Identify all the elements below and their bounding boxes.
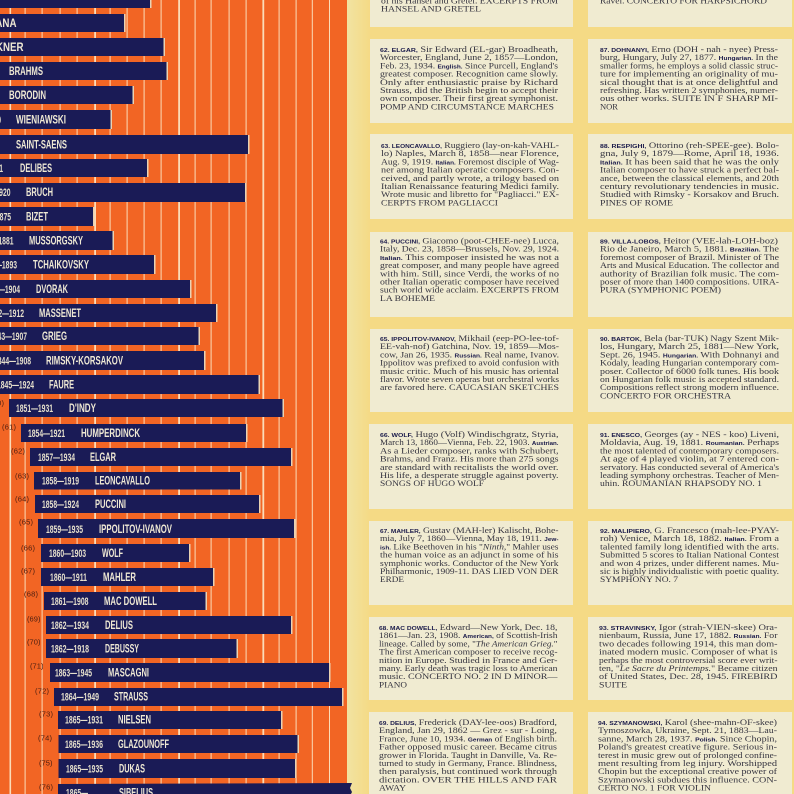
bar: Brahms: BRAHMS bbox=[9, 66, 43, 78]
bar: Ippolitov-Ivanov: IPPOLITOV-IVANOV bbox=[99, 524, 172, 536]
label: number 66: (66) bbox=[21, 544, 36, 552]
card 62: Elgar: greatest composer. Recognition came slowly. bbox=[380, 69, 558, 79]
bar: Humperdinck: HUMPERDINCK bbox=[81, 428, 140, 440]
bar: Wolf: 1860—1903 bbox=[49, 548, 86, 560]
card 92: Malipiero: and won 4 prizes, under different names. Mu- bbox=[600, 558, 779, 568]
card 87: Dohnanyi bbox=[588, 39, 792, 123]
panel: composer timeline chart bbox=[0, 0, 352, 794]
label: number 76: (76) bbox=[39, 782, 54, 792]
card 68: Mac Dowell: PIANO bbox=[379, 679, 407, 689]
panel: biography cards, left column bbox=[369, 0, 573, 794]
panel: biography cards, right column bbox=[588, 0, 792, 794]
card 94: Szymanowski: sanne, March 28, 1937. Polish. Since Chopin, bbox=[598, 733, 777, 743]
card 63: Leoncavallo: 63. LEONCAVALLO, Ruggiero (lay-on-kah-VAHL- bbox=[381, 140, 559, 150]
bar: Puccini bbox=[35, 495, 260, 513]
card 66: Wolf: SONGS OF HUGO WOLF bbox=[380, 478, 484, 488]
card 61: Humperdinck tail bbox=[370, 0, 573, 27]
bar: Wieniawski bbox=[0, 110, 112, 129]
card 94: Szymanowski: Tymoszowka, Ukraine, Sept. 21, 1883—Lau- bbox=[598, 725, 777, 735]
bar: Puccini: 1858—1924 bbox=[42, 499, 80, 511]
bar: Mac Dowell bbox=[44, 592, 207, 610]
card 63: Leoncavallo: Wrote music and libretto for "Pagliacci." EX- bbox=[381, 189, 559, 199]
card 88: Respighi: 88. RESPIGHI, Ottorino (reh-SPEE-gee). Bolo- bbox=[600, 140, 779, 150]
card 65: Ippolitov-Ivanov: 65. IPPOLITOV-IVANOV, Mikhail (eep-PO-lee-tof- bbox=[380, 333, 559, 343]
label: number 61: (61) bbox=[2, 422, 16, 432]
card 64: Puccini: Italian. This composer insisted he was not a bbox=[380, 252, 559, 262]
bar: Elgar bbox=[30, 448, 292, 466]
card 91: Enesco: servatory. Has conducted several of America's bbox=[600, 462, 780, 472]
bar: Smetana bbox=[0, 14, 126, 32]
card 94: Szymanowski: 94. SZYMANOWSKI, Karol (shee-mahn-OF-skee) bbox=[598, 717, 777, 727]
card 65: Ippolitov-Ivanov: are favored here. CAUCASIAN SKETCHES bbox=[380, 382, 559, 392]
label: number 69: (69) bbox=[27, 614, 41, 624]
card 66: Wolf: March 13, 1860—Vienna, Feb. 22, 1903. Austrian. bbox=[380, 437, 559, 447]
card 69: Delius: England, Jan 29, 1862 — Grez - sur - Loing, bbox=[379, 725, 557, 735]
card 94: Szymanowski: Chopin but the exceptional creative power of bbox=[598, 766, 777, 776]
card 66: Wolf: Brahms, and Franz. His more than 275 songs bbox=[380, 454, 559, 464]
card 69: Delius bbox=[369, 712, 573, 794]
card 87: Dohnanyi: sical thought that is at once delightful and bbox=[600, 77, 779, 87]
bar: Elgar: ELGAR bbox=[90, 452, 116, 464]
card 63: Leoncavallo: Italian Renaissance featuring Medici family. bbox=[381, 181, 559, 191]
bar: Glazounoff: GLAZOUNOFF bbox=[118, 739, 169, 751]
bar: Grieg bbox=[0, 327, 200, 345]
bar: Glazounoff bbox=[58, 735, 299, 753]
card 68: Mac Dowell: lineage. Called by some, " The American Grieg. " bbox=[379, 638, 558, 648]
label: number 75: (75) bbox=[39, 758, 53, 768]
bar: Bizet bbox=[0, 207, 94, 226]
bar: Leoncavallo: LEONCAVALLO bbox=[95, 476, 150, 488]
bar: D'Indy: D'INDY bbox=[69, 403, 96, 415]
card 90: Bartok: Sept. 26, 1945. Hungarian. With Dohnanyi and bbox=[600, 349, 780, 359]
card 62: Elgar: 62. ELGAR, Sir Edward (EL-gar) Broadheath, bbox=[380, 44, 558, 54]
card 87: Dohnanyi: refreshing. Has written 2 symphonies, numer- bbox=[600, 85, 778, 95]
bar: Rimsky-Korsakov: RIMSKY-KORSAKOV bbox=[46, 356, 123, 368]
card 88: Respighi: gna, July 9, 1879—Rome, April 18, 1936. bbox=[600, 148, 779, 158]
card 63: Leoncavallo: ner among Italian operatic composers. Con- bbox=[381, 165, 559, 175]
card 69: Delius: AWAY bbox=[379, 783, 406, 793]
card 92: Malipiero: 92. MALIPIERO, G. Francesco (mah-lee-PYAY- bbox=[600, 525, 779, 535]
card 62: Elgar: Only after enthusiastic praise by Richard bbox=[380, 77, 559, 87]
bar: Ippolitov-Ivanov bbox=[38, 519, 296, 538]
card 94: Szymanowski bbox=[588, 712, 792, 794]
label: number 68: (68) bbox=[24, 590, 38, 598]
card 61: Humperdinck tail: HANSEL AND GRETEL bbox=[381, 4, 481, 14]
card 64: Puccini bbox=[370, 232, 573, 317]
card 66: Wolf bbox=[369, 424, 573, 509]
card 94: Szymanowski: CERTO NO. 1 FOR VIOLIN bbox=[598, 783, 712, 793]
card 65: Ippolitov-Ivanov bbox=[370, 329, 573, 412]
card 66: Wolf: are standard with recitalists the world over. bbox=[380, 462, 558, 472]
card 87: Dohnanyi: NOR bbox=[600, 101, 618, 111]
card 89: Villa-Lobos: authority of Brazilian folk music. The com- bbox=[600, 268, 779, 278]
card 94: Szymanowski: Poland's greatest creative figure. Serious in- bbox=[598, 742, 777, 752]
bar: Faure: FAURE bbox=[49, 380, 74, 392]
bar: Sibelius bbox=[58, 783, 352, 794]
bar: Wolf: WOLF bbox=[102, 548, 123, 560]
card 87: Dohnanyi: ous other works. SUITE IN F SHARP MI- bbox=[600, 93, 778, 103]
bar: Massenet: MASSENET bbox=[39, 308, 81, 320]
bar: Wolf bbox=[41, 544, 190, 562]
card 90: Bartok: poser. Collector of 6000 folk tunes. His book bbox=[600, 366, 780, 376]
bar: Bizet: BIZET bbox=[26, 212, 48, 224]
bar: Mascagni: 1863—1945 bbox=[55, 668, 92, 680]
bar: Debussy: DEBUSSY bbox=[105, 644, 139, 656]
bar: Strauss: 1864—1949 bbox=[61, 692, 99, 704]
card 62: Elgar: Feb. 23, 1934. English. Since Purcell, England's bbox=[380, 60, 559, 70]
card 93: Stravinsky: 93. STRAVINSKY, Igor (strah-VIEN-skee) Ora- bbox=[599, 622, 778, 632]
card 67: Mahler bbox=[369, 521, 573, 605]
card 86: Ravel follower tail bbox=[588, 0, 792, 27]
card 89: Villa-Lobos: poser of more than 1400 compositions. UIRA- bbox=[600, 276, 779, 286]
bar: Dukas: DUKAS bbox=[119, 764, 145, 776]
bar: Nielsen bbox=[58, 711, 282, 729]
bar: D'Indy: 1851—1931 bbox=[16, 403, 53, 415]
card 93: Stravinsky: inated modern music. Composer of what is bbox=[599, 647, 778, 657]
bar: Borodin: BORODIN bbox=[9, 90, 46, 102]
card 69: Delius: Father opposed music career. Became citrus bbox=[379, 742, 558, 752]
card 88: Respighi: Italian composer to have struck a perfect bal- bbox=[600, 165, 779, 175]
bar: Elgar: 1857—1934 bbox=[38, 452, 76, 464]
card 64: Puccini: other Italian operatic composer have received bbox=[380, 276, 560, 286]
card 67: Mahler: ish. Like Beethoven in his " Ninth," Mahler uses bbox=[380, 541, 559, 551]
bar: Brahms bbox=[0, 62, 168, 80]
bar: Dvorak bbox=[0, 280, 192, 298]
card 91: Enesco bbox=[588, 424, 792, 509]
bar: Dukas bbox=[58, 759, 296, 778]
bar: D'Indy bbox=[9, 399, 284, 417]
card 62: Elgar: Worcester, England, June 2, 1857—London, bbox=[380, 52, 558, 62]
card 87: Dohnanyi: ture for implementing an originality of mu- bbox=[600, 69, 778, 79]
card 94: Szymanowski: terest in music grew out of prolonged confine- bbox=[598, 750, 777, 760]
bar: Leoncavallo bbox=[34, 472, 242, 490]
card 63: Leoncavallo bbox=[370, 134, 573, 219]
card 69: Delius: then paralysis, but continued work through bbox=[379, 766, 558, 776]
card 93: Stravinsky: two decades following 1914, this man dom- bbox=[599, 638, 778, 648]
card 65: Ippolitov-Ivanov: cow, Jan 26, 1935. Russian. Real name, Ivanov. bbox=[380, 349, 559, 359]
card 62: Elgar bbox=[370, 39, 573, 123]
card 87: Dohnanyi: 87. DOHNANYI, Erno (DOH - nah - nyee) Press- bbox=[600, 44, 778, 54]
label: number 67: (67) bbox=[21, 566, 36, 576]
card 94: Szymanowski: ment resulting from leg injury. Worshipped bbox=[598, 758, 778, 768]
card 67: Mahler: ERDE bbox=[380, 574, 404, 584]
card 69: Delius: turned to study in Germany, France. Blindness, bbox=[379, 758, 557, 768]
bar: Puccini: PUCCINI bbox=[95, 499, 126, 511]
bar: Bruch: BRUCH bbox=[26, 187, 53, 199]
label: number 65: (65) bbox=[19, 518, 34, 526]
card 93: Stravinsky: perhaps the most controversial score ever writ- bbox=[599, 655, 778, 665]
bar: Grieg: GRIEG bbox=[42, 331, 67, 343]
label: number 64: (64) bbox=[15, 494, 30, 504]
card 69: Delius: grower in Florida. Taught in Danville, Va. Re- bbox=[379, 750, 557, 760]
bar: Humperdinck: 1854—1921 bbox=[28, 428, 65, 440]
card 88: Respighi: ance, between the classical elements, and 20th bbox=[600, 173, 780, 183]
card 64: Puccini: LA BOHEME bbox=[380, 293, 435, 303]
card 64: Puccini: such world wide acclaim. EXCERPTS FROM bbox=[380, 285, 559, 295]
paper edge highlight bbox=[347, 0, 370, 794]
card 90: Bartok bbox=[588, 329, 792, 412]
card 68: Mac Dowell: 68. MAC DOWELL, Edward—New York, Dec. 18, bbox=[379, 622, 558, 632]
card 92: Malipiero: talented family long identified with the arts. bbox=[600, 541, 779, 551]
card 89: Villa-Lobos bbox=[588, 232, 792, 317]
card 63: Leoncavallo: ceived, and partly wrote, a trilogy based on bbox=[381, 173, 560, 183]
bar: Bruckner bbox=[0, 38, 165, 56]
card 68: Mac Dowell: nition in Europe. Studied in France and Ger- bbox=[379, 655, 558, 665]
bar: Glazounoff: 1865—1936 bbox=[65, 739, 103, 751]
card 89: Villa-Lobos: foremost composer of Brazil. Minister of The bbox=[600, 252, 779, 262]
bar: Mascagni bbox=[50, 663, 330, 682]
card 63: Leoncavallo: Aug. 9, 1919. Italian. Foremost disciple of Wag- bbox=[381, 156, 559, 166]
card 91: Enesco: uhin. ROUMANIAN RHAPSODY NO. 1 bbox=[600, 478, 762, 488]
bar: unnamed top composer bbox=[0, 0, 152, 8]
label: number 70: (70) bbox=[27, 638, 41, 646]
label: number 71: (71) bbox=[30, 662, 44, 670]
bar: Delius: DELIUS bbox=[105, 620, 133, 632]
card 88: Respighi: Italian. It has been said that he was the only bbox=[600, 156, 780, 166]
card 90: Bartok: Kodaly, leading Hungarian contemporary com- bbox=[600, 358, 779, 368]
card 67: Mahler: mia, July 7, 1860—Vienna, May 18, 1911. Jew- bbox=[380, 533, 559, 543]
bar: Humperdinck bbox=[21, 424, 248, 442]
card 91: Enesco: 91. ENESCO, Georges (ay - NES - koo) Liveni, bbox=[600, 429, 779, 439]
card 64: Puccini: with him. Still, since Verdi, the works of no bbox=[380, 268, 559, 278]
bar: Borodin bbox=[0, 86, 134, 104]
card 93: Stravinsky bbox=[588, 617, 792, 700]
bar: Mahler bbox=[41, 568, 214, 586]
bar: Delius: 1862—1934 bbox=[51, 620, 90, 632]
bar: Mac Dowell: MAC DOWELL bbox=[104, 596, 157, 608]
bar: Delibes bbox=[0, 159, 148, 177]
bar: Faure bbox=[0, 375, 260, 394]
bar: Mascagni: MASCAGNI bbox=[108, 668, 149, 680]
card 87: Dohnanyi: burg, Hungary, July 27, 1877. Hungarian. In the bbox=[600, 52, 778, 62]
bar: Nielsen: 1865—1931 bbox=[65, 714, 103, 726]
bar: Debussy bbox=[46, 639, 238, 658]
card 90: Bartok: CONCERTO FOR ORCHESTRA bbox=[600, 390, 732, 400]
card 90: Bartok: los, Hungary, March 25, 1881—New York, bbox=[600, 341, 779, 351]
bar: Wieniawski: WIENIAWSKI bbox=[16, 114, 66, 126]
card 62: Elgar: Strauss, did the British begin to accept their bbox=[380, 85, 558, 95]
label: number 73: (73) bbox=[39, 710, 54, 718]
card 63: Leoncavallo: lo) Naples, March 8, 1858—near Florence, bbox=[381, 148, 559, 158]
card 93: Stravinsky: ten, " Le Sacre du Printemps. " Became citizen bbox=[599, 663, 778, 673]
card 92: Malipiero: Submitted 5 scores to Italian National Contest bbox=[600, 550, 780, 560]
bar: Nielsen: NIELSEN bbox=[118, 714, 151, 726]
bar: Dukas: 1865—1935 bbox=[66, 764, 103, 776]
card 63: Leoncavallo: CERPTS FROM PAGLIACCI bbox=[381, 197, 498, 207]
card 65: Ippolitov-Ivanov: EE-vah-nof) Gatchina, Nov. 19, 1859—Mos- bbox=[380, 341, 559, 351]
card 92: Malipiero: SYMPHONY NO. 7 bbox=[600, 574, 679, 584]
bar: Saint-Saens: SAINT-SAENS bbox=[16, 140, 67, 152]
bar: Bruch bbox=[0, 183, 246, 202]
bar: Strauss: STRAUSS bbox=[114, 692, 148, 704]
bar: Strauss bbox=[54, 688, 344, 706]
card 65: Ippolitov-Ivanov: flavor. Wrote seven operas but orchestral works bbox=[380, 374, 560, 384]
card 89: Villa-Lobos: 89. VILLA-LOBOS, Heitor (VEE-lah-LOH-boz) bbox=[600, 236, 778, 246]
bar: Tchaikovsky: TCHAIKOVSKY bbox=[33, 260, 89, 272]
card 89: Villa-Lobos: Arts and Musical Education. The collector and bbox=[600, 260, 780, 270]
card 90: Bartok: on Hungarian folk music is accepted standard. bbox=[600, 374, 779, 384]
label: number 62: (62) bbox=[11, 446, 26, 456]
bar: Rimsky-Korsakov bbox=[0, 351, 206, 370]
card 88: Respighi: century revolutionary tendencies in music. bbox=[600, 181, 779, 191]
card 88: Respighi: Studied with Rimsky - Korsakov and Bruch. bbox=[600, 189, 779, 199]
card 92: Malipiero: roh) Venice, March 18, 1882. Italian. From a bbox=[600, 533, 779, 543]
bar: Delibes: DELIBES bbox=[20, 163, 52, 175]
card 66: Wolf: 66. WOLF, Hugo (Volf) Windischgratz, Styria, bbox=[380, 429, 558, 439]
card 64: Puccini: Italy, Dec. 23, 1858—Brussels, Nov. 29, 1924. bbox=[380, 244, 559, 254]
label: number 74: (74) bbox=[38, 734, 52, 742]
label: number 63: (63) bbox=[15, 472, 30, 480]
card 91: Enesco: the most talented of contemporary composers. bbox=[600, 445, 779, 455]
bar: Dvorak: DVORAK bbox=[36, 284, 68, 296]
card 93: Stravinsky: of United States, Dec. 28, 1945. FIREBIRD bbox=[599, 671, 778, 681]
card 67: Mahler: the human voice as an adjunct in some of his bbox=[380, 550, 559, 560]
card 91: Enesco: leading symphony orchestras. Teacher of Men- bbox=[600, 470, 779, 480]
card 91: Enesco: At age of 4 played violin, at 7 entered con- bbox=[600, 454, 779, 464]
card 66: Wolf: As a Lieder composer, ranks with Schubert, bbox=[380, 445, 558, 455]
card 65: Ippolitov-Ivanov: Ippolitov was prefixed to avoid confusion with bbox=[380, 358, 560, 368]
label: number 72: (72) bbox=[35, 686, 50, 696]
card 90: Bartok: Compositions reflect strong modern influence. bbox=[600, 382, 779, 392]
card 67: Mahler: Philharmonic, 1909-11. DAS LIED VON DER bbox=[380, 566, 559, 576]
bar: Ippolitov-Ivanov: 1859—1935 bbox=[46, 524, 83, 536]
card 68: Mac Dowell: music. CONCERTO NO. 2 IN D MINOR— bbox=[379, 671, 558, 681]
bar: Mahler: 1860—1911 bbox=[50, 572, 87, 584]
card 64: Puccini: great composer, and many people have agreed bbox=[380, 260, 560, 270]
card 62: Elgar: POMP AND CIRCUMSTANCE MARCHES bbox=[380, 101, 554, 111]
card 69: Delius: dictation. OVER THE HILLS AND FAR bbox=[379, 774, 557, 784]
bar: Mussorgsky: MUSSORGSKY bbox=[29, 236, 83, 248]
card 68: Mac Dowell: 1861—Jan. 23, 1908. American, of Scottish-Irish bbox=[379, 630, 558, 640]
bar: Delius bbox=[46, 616, 292, 634]
card 88: Respighi bbox=[588, 134, 792, 219]
card 69: Delius: 69. DELIUS, Frederick (DAY-lee-oos) Bradford, bbox=[379, 717, 557, 727]
bar: Tchaikovsky bbox=[0, 255, 156, 274]
card 69: Delius: France, June 10, 1934. German of English birth. bbox=[379, 733, 557, 743]
card 93: Stravinsky: SUITE bbox=[599, 679, 627, 689]
card 90: Bartok: 90. BARTOK, Bela (bar-TUK) Nagy Szent Mik- bbox=[600, 333, 779, 343]
card 94: Szymanowski: Szymanowski subdues this influence. CON- bbox=[598, 774, 777, 784]
card 65: Ippolitov-Ivanov: music critic. Much of his music has oriental bbox=[380, 366, 560, 376]
orange chart field bbox=[0, 0, 347, 794]
bar: Mahler: MAHLER bbox=[103, 572, 136, 584]
card 88: Respighi: PINES OF ROME bbox=[600, 197, 673, 207]
bar: Massenet bbox=[0, 304, 218, 322]
card 68: Mac Dowell: The first American composer to receive recog- bbox=[379, 647, 558, 657]
card 66: Wolf: His life, a desperate struggle against poverty. bbox=[380, 470, 558, 480]
bar: Mussorgsky bbox=[0, 231, 114, 250]
bar: Debussy: 1862—1918 bbox=[51, 644, 89, 656]
card 89: Villa-Lobos: PURA (SYMPHONIC POEM) bbox=[600, 285, 721, 295]
card 67: Mahler: 67. MAHLER, Gustav (MAH-ler) Kalischt, Bohe- bbox=[380, 525, 559, 535]
card 92: Malipiero: sic is highly individualistic with poetic quality. bbox=[600, 566, 779, 576]
bar: Leoncavallo: 1858—1919 bbox=[42, 476, 79, 488]
card 68: Mac Dowell bbox=[369, 617, 573, 700]
card 67: Mahler: symphonic works. Conductor of the New York bbox=[380, 558, 559, 568]
card 93: Stravinsky: nienbaum, Russia, June 17, 1882. Russian. For bbox=[599, 630, 778, 640]
card 68: Mac Dowell: many. Early death was tragic loss to American bbox=[379, 663, 558, 673]
card 92: Malipiero bbox=[588, 521, 792, 605]
card 91: Enesco: Moldavia, Aug. 19, 1881. Roumanian. Perhaps bbox=[600, 437, 780, 447]
card 87: Dohnanyi: smaller forms, he employs a solid classic struc- bbox=[600, 60, 778, 70]
card 89: Villa-Lobos: Rio de Janeiro, March 5, 1881. Brazilian. The bbox=[600, 244, 779, 254]
bar: Saint-Saens bbox=[0, 135, 250, 154]
bar: Mac Dowell: 1861—1908 bbox=[51, 596, 88, 608]
card 64: Puccini: 64. PUCCINI, Giacomo (poot-CHEE-nee) Lucca, bbox=[380, 236, 559, 246]
card 62: Elgar: own composer. Their first great symphonist. bbox=[380, 93, 558, 103]
